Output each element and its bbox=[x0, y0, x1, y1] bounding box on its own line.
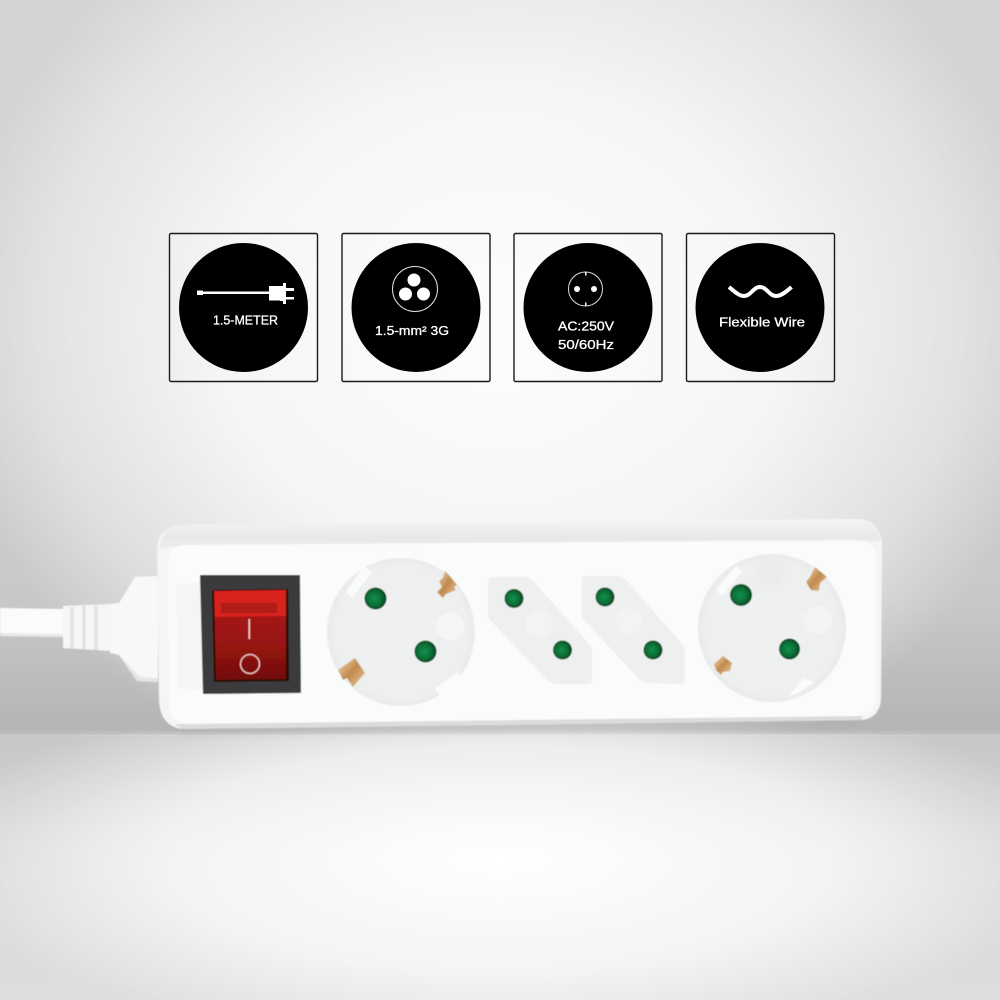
label: voltage and frequency: AC:250V bbox=[558, 318, 614, 334]
switch mounting plate bbox=[176, 582, 203, 690]
label: 1.5-mm² 3G: 1.5-mm² 3G bbox=[375, 323, 449, 338]
strip bottom edge bbox=[175, 716, 862, 729]
background floor bbox=[0, 733, 1000, 1000]
label: voltage and frequency: 50/60Hz bbox=[558, 337, 614, 352]
icon: cord and plug bbox=[197, 283, 294, 304]
strip body bbox=[157, 519, 882, 729]
strip face bbox=[168, 540, 876, 724]
icon: wave bbox=[729, 287, 792, 296]
icon: socket outline bbox=[568, 272, 602, 306]
outlet: two-pin left bbox=[488, 577, 592, 684]
panel: wire cross-section bbox=[342, 234, 490, 382]
feature icons row bbox=[170, 234, 834, 382]
strip top bevel bbox=[160, 519, 880, 550]
panel: voltage bbox=[514, 234, 662, 382]
cord bbox=[0, 576, 158, 682]
icon: three conductors bbox=[392, 266, 438, 312]
panel: flexible wire bbox=[686, 234, 834, 382]
panel: cable length bbox=[170, 234, 318, 382]
label: voltage and frequency bbox=[558, 318, 614, 352]
outlet: right schuko bbox=[698, 554, 846, 702]
power strip bbox=[0, 519, 882, 734]
background wall bbox=[0, 0, 1000, 735]
rocker switch bbox=[200, 575, 301, 694]
label: 1.5-METER: 1.5-METER bbox=[213, 312, 278, 328]
outlet: two-pin right bbox=[582, 576, 685, 684]
floor shadow bbox=[180, 716, 860, 734]
outlet: left schuko bbox=[327, 558, 475, 706]
label: Flexible Wire: Flexible Wire bbox=[719, 314, 805, 330]
